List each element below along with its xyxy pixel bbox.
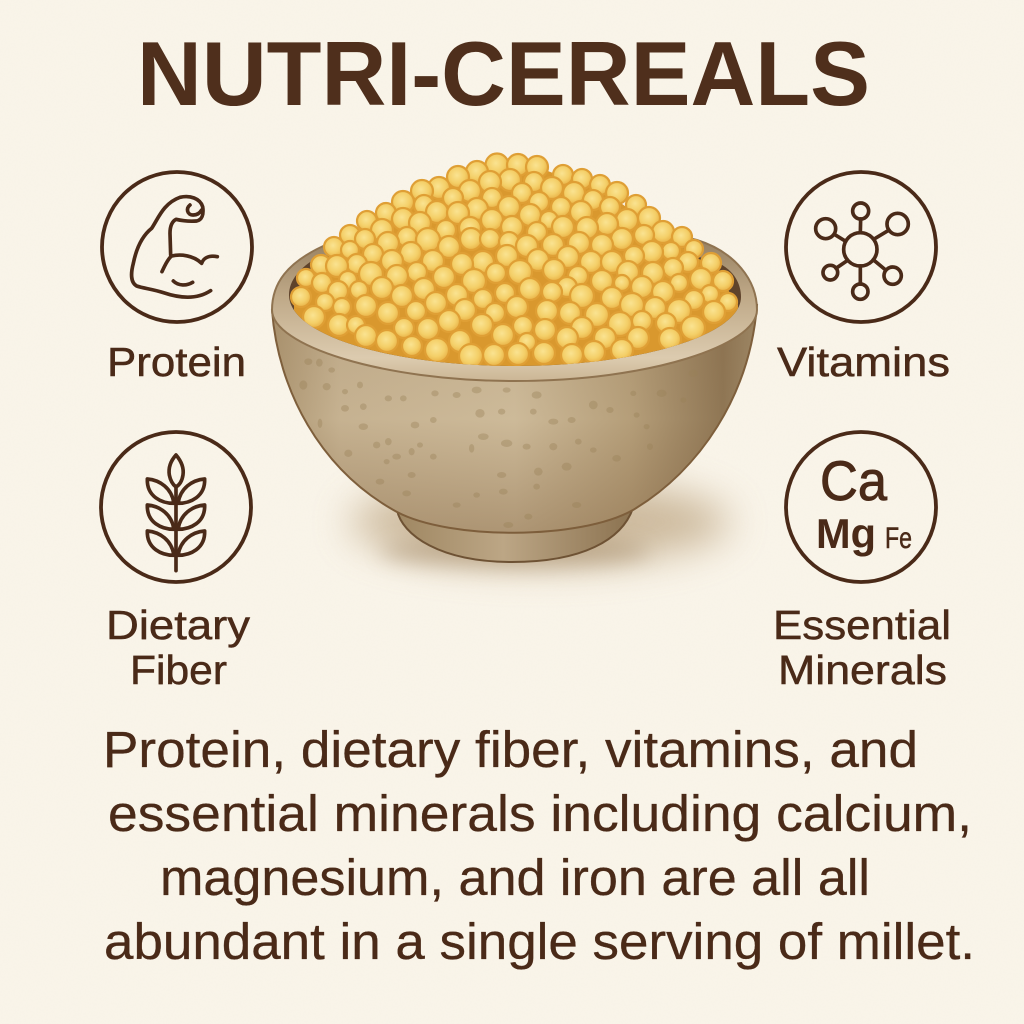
- label: essential minerals: Minerals: [778, 647, 947, 693]
- label: essential minerals: [773, 602, 951, 693]
- icon: molecule network: [786, 172, 936, 322]
- title: NUTRI-CEREALS: [137, 24, 870, 125]
- label: protein: Protein: [107, 339, 246, 385]
- text block: description: magnesium, and iron are all all: [160, 849, 870, 906]
- bowl interior: [289, 241, 741, 366]
- panel: protein: [102, 172, 252, 385]
- panel: essential minerals: [773, 432, 951, 693]
- icon: mineral symbols: Mg: [816, 510, 876, 557]
- icon: flexed arm: [102, 172, 252, 322]
- millet grains: [291, 154, 738, 370]
- panel: vitamins: [777, 172, 950, 385]
- bowl body: [272, 305, 757, 533]
- text block: description: Protein, dietary fiber, vitamins, and: [103, 721, 918, 778]
- icon: mineral symbols: Ca: [820, 449, 888, 512]
- bowl foot: [397, 508, 633, 562]
- icon: wheat sprig: [101, 432, 251, 582]
- label: dietary fiber: [106, 602, 251, 693]
- text block: description: [103, 721, 975, 970]
- text block: description: essential minerals including calcium,: [108, 785, 972, 842]
- bowl rim: [272, 228, 757, 381]
- label: essential minerals: Essential: [773, 602, 951, 648]
- illustration: bowl of millet: [272, 154, 757, 568]
- label: vitamins: Vitamins: [777, 339, 950, 385]
- label: dietary fiber: Dietary: [106, 602, 251, 648]
- bowl shadow: [350, 480, 730, 568]
- label: dietary fiber: Fiber: [130, 647, 227, 693]
- panel: dietary fiber: [101, 432, 251, 693]
- text block: description: abundant in a single serving of millet.: [104, 913, 975, 970]
- icon: mineral symbols: Fe: [885, 522, 912, 555]
- icon: mineral symbols: [786, 432, 936, 582]
